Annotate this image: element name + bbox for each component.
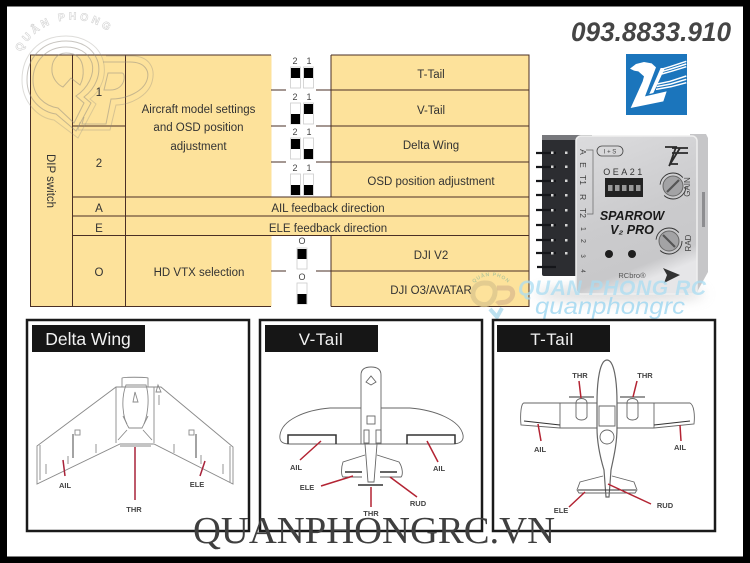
column: switch numbers: [95, 87, 104, 279]
column: function names: DJI V2: [414, 250, 448, 262]
callout lines: [538, 381, 681, 507]
column: function names: [269, 69, 495, 297]
DIP switch diagrams: 1: [306, 127, 312, 137]
callout labels: RUD: [410, 499, 427, 508]
DIP switch block: OEA21: [603, 167, 645, 177]
callout labels: THR: [363, 509, 379, 518]
column: switch numbers: 1: [96, 87, 102, 99]
callout labels: ELE: [300, 483, 314, 492]
column: switch numbers: 2: [96, 158, 102, 170]
callout labels: AIL: [59, 481, 71, 490]
callout labels: RUD: [657, 501, 674, 510]
watermark: QP logo top left: QUÂN PHONG: [16, 12, 110, 51]
port labels: 1: [579, 227, 586, 231]
text: aircraft model settings: and OSD position: [153, 122, 244, 134]
panel: V-Tail: [260, 320, 482, 531]
heading: T-Tail: T-Tail: [530, 330, 574, 349]
side wall: [690, 134, 708, 292]
panel: T-Tail: [493, 320, 715, 531]
column: function names: DJI O3/AVATAR: [390, 285, 472, 297]
column: function names: Delta Wing: [403, 140, 459, 152]
port labels: T1: [578, 175, 588, 185]
watermark: Quan Phong RC: QUÂN PHONG: [472, 272, 510, 282]
port labels: A: [578, 149, 588, 155]
column: switch numbers: E: [95, 223, 103, 235]
callout labels: THR: [572, 371, 588, 380]
text: HD VTX selection: HD VTX selection: [154, 267, 244, 279]
callout lines: [300, 441, 438, 507]
DIP switch diagrams: 1: [306, 92, 312, 102]
product photo: Sparrow V2 Pro controller: [535, 134, 708, 302]
watermark: Quan Phong RC: quanphongrc: [535, 293, 686, 319]
rad knob: [656, 228, 682, 254]
callout labels: ELE: [554, 506, 568, 515]
product photo: Sparrow V2 Pro controller: RAD: [684, 234, 693, 251]
voltage badge: [597, 146, 623, 156]
heading: Delta Wing: Delta Wing: [45, 329, 131, 349]
heading: V-Tail: [265, 325, 378, 352]
model name: [600, 209, 665, 237]
heading: V-Tail: V-Tail: [299, 330, 343, 349]
DIP switch diagrams: 1: [306, 163, 312, 173]
column: function names: ELE feedback direction: [269, 223, 387, 235]
text: aircraft model settings: adjustment: [170, 141, 227, 153]
heading: Delta Wing: [32, 325, 145, 352]
callout labels: AIL: [534, 445, 546, 454]
callout labels: THR: [637, 371, 653, 380]
column: switch numbers: A: [95, 203, 103, 215]
brand logo: [626, 54, 687, 115]
DIP switch diagrams: O: [298, 272, 306, 282]
watermark: Quan Phong RC: QUAN PHONG RC: [518, 277, 707, 300]
gain knob: [660, 173, 686, 199]
port labels: E: [578, 162, 588, 168]
model name: V₂ PRO: [610, 223, 654, 237]
product photo: Sparrow V2 Pro controller: I + S: [604, 150, 616, 156]
column: function names: V-Tail: [417, 105, 445, 117]
DIP switch diagrams: 2: [292, 56, 298, 66]
text: aircraft model settings: [142, 104, 256, 153]
watermark: QP logo top left: [16, 12, 154, 138]
column: function names: T-Tail: [417, 69, 445, 81]
port labels: [578, 149, 588, 273]
DIP switch diagrams: 2: [292, 163, 298, 173]
maker mark and arrow: RCbro®: [618, 271, 646, 280]
diagram: V-tail aircraft: [280, 367, 463, 485]
model name: SPARROW: [600, 209, 665, 223]
port labels: R: [578, 194, 588, 200]
column: switch numbers: O: [95, 267, 104, 279]
LEDs: [605, 250, 613, 258]
watermark: website address: QUANPHONGRC.VN: [193, 510, 555, 552]
callout labels: AIL: [433, 464, 445, 473]
phone number: 093.8833.910: [571, 17, 731, 47]
callout labels: THR: [126, 505, 142, 514]
DIP switch diagrams: O: [298, 236, 306, 246]
callout labels: ELE: [190, 480, 204, 489]
DIP switch diagrams: 1: [306, 56, 312, 66]
column: function names: OSD position adjustment: [367, 176, 495, 188]
connector block: [542, 136, 582, 276]
port labels: 2: [579, 239, 586, 243]
heading: T-Tail: [497, 325, 610, 352]
callout labels: [534, 371, 686, 515]
diagram: T-tail aircraft: [521, 360, 694, 497]
DIP switch diagrams: 2: [292, 127, 298, 137]
DIP switch table: [30, 55, 529, 306]
port labels: 3: [579, 254, 585, 258]
port labels: T2: [578, 208, 588, 218]
port labels: 4: [579, 269, 585, 273]
small brand mark: [665, 147, 688, 166]
callout labels: [290, 463, 445, 518]
text: aircraft model settings: Aircraft model settings: [142, 104, 256, 116]
watermark: Quan Phong RC: [470, 272, 707, 319]
label: DIP switch: DIP switch: [44, 154, 56, 208]
callout lines: [63, 447, 205, 500]
product photo: Sparrow V2 Pro controller: GAIN: [683, 177, 692, 197]
callout labels: [59, 480, 204, 514]
silver top plate: [576, 136, 697, 294]
DIP switch diagrams: [290, 56, 314, 304]
panel: Delta Wing: [27, 320, 249, 531]
DIP switch diagrams: 2: [292, 92, 298, 102]
column: function names: AIL feedback direction: [271, 203, 385, 215]
callout labels: AIL: [290, 463, 302, 472]
diagram: delta wing aircraft: [37, 377, 233, 484]
callout labels: AIL: [674, 443, 686, 452]
